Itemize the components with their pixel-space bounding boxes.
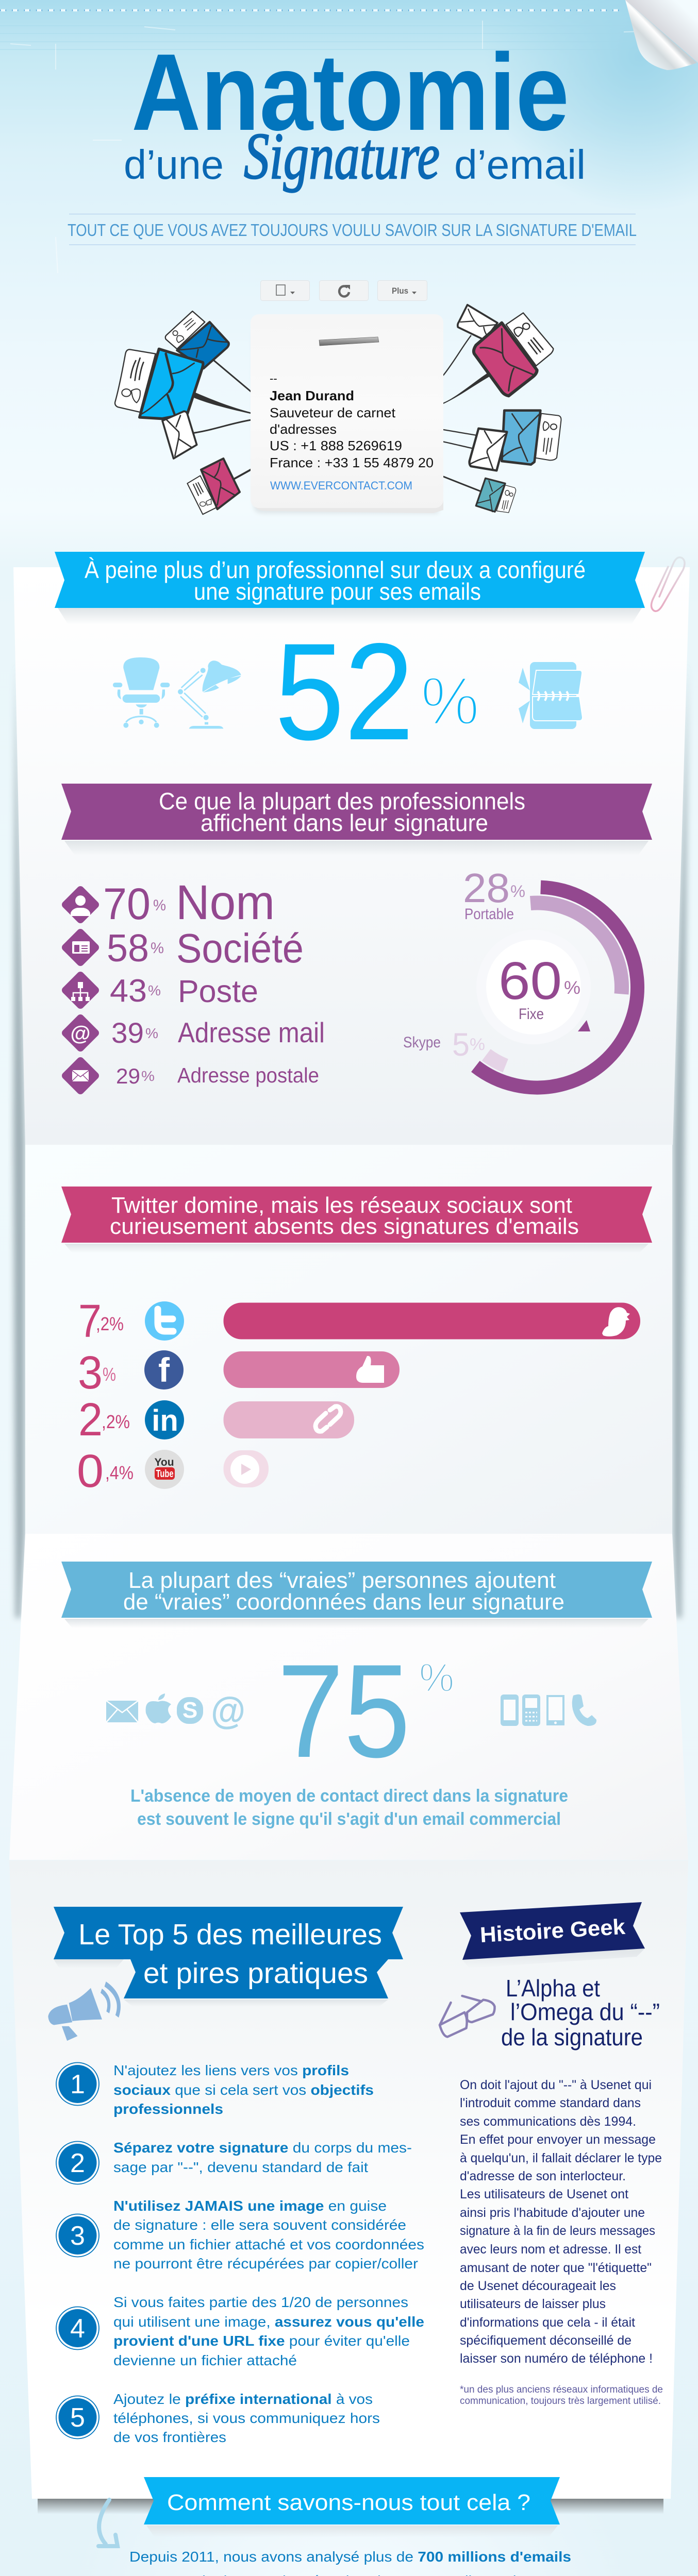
- icon: handset: [572, 1694, 596, 1726]
- signature text: WWW.EVERCONTACT.COM: [270, 479, 412, 492]
- arc: skype 5%: [486, 1055, 506, 1065]
- footnote: [460, 2384, 663, 2406]
- icon: skype: [177, 1697, 203, 1724]
- icon: facebook: [144, 1350, 184, 1389]
- footnote: communication, toujours très largement utilisé.: [460, 2396, 661, 2406]
- signature text: --: [270, 372, 277, 385]
- tip 2: sage par "--", devenu standard de fait: [113, 2159, 368, 2175]
- stat: 52%: 52: [275, 614, 414, 769]
- title: d'une Signature d'email: d’email: [454, 142, 586, 188]
- row: twitter 7,2%: ,2%: [96, 1313, 124, 1334]
- heading: l'alpha et l'omega: de la signature: [501, 2024, 643, 2050]
- tip 2: 2: [70, 2148, 85, 2178]
- tip 2: [56, 2140, 412, 2184]
- signature text: Jean Durand: [270, 388, 354, 403]
- row: facebook 3%: 3: [78, 1347, 103, 1399]
- illustration: envelopes right: [443, 305, 561, 513]
- label: 5% skype: Skype: [403, 1034, 441, 1051]
- icon: envelope: [106, 1701, 138, 1722]
- text: histoire geek body: En effet pour envoyer un message: [460, 2132, 656, 2147]
- tip 4: [56, 2294, 424, 2368]
- tip 1: 1: [70, 2070, 85, 2099]
- tip 1: sociaux que si cela sert vos objectifs: [113, 2082, 374, 2098]
- list: contents of signature: [60, 875, 325, 1096]
- row: linkedin 2,2%: 2: [78, 1394, 103, 1446]
- icon: mobile keypad: [522, 1694, 540, 1726]
- banner: histoire geek: [460, 1902, 645, 1968]
- banner: top 5: Le Top 5 des meilleures: [78, 1918, 382, 1951]
- tip 4: devienne un fichier attaché: [113, 2352, 297, 2368]
- mail toolbar buttons: [261, 280, 427, 301]
- text: histoire geek body: d'adresse de son interlocteur.: [460, 2169, 626, 2183]
- icon: play: [230, 1455, 259, 1484]
- signature text: France : +33 1 55 4879 20: [270, 455, 434, 470]
- tip 1: N'ajoutez les liens vers vos profils: [113, 2062, 349, 2078]
- banner: vraies personnes: [61, 1562, 652, 1628]
- signature card: [251, 314, 443, 514]
- label: 28% portable: Portable: [464, 906, 514, 923]
- bar: linkedin: [224, 1401, 354, 1438]
- banner: twitter domine: curieusement absents des signatures d'emails: [110, 1214, 579, 1239]
- tip 2: Séparez votre signature du corps du mes-: [113, 2140, 412, 2156]
- banner: histoire geek: Histoire Geek: [479, 1914, 626, 1947]
- banner: vraies personnes: La plupart des “vraies” personnes ajoutent: [128, 1568, 556, 1593]
- item: Nom 70%: 70: [103, 879, 151, 929]
- icon: twitter: [145, 1301, 184, 1341]
- icon: youtube: You: [154, 1456, 174, 1468]
- text: methodology: [84, 2549, 617, 2576]
- item: Société 58%: [60, 925, 304, 971]
- heading: l'alpha et l'omega: L’Alpha et: [506, 1975, 600, 2002]
- text: histoire geek body: ses communications dès 1994.: [460, 2114, 636, 2129]
- item: Poste 43%: [60, 970, 258, 1010]
- paper section 2: [25, 1145, 672, 1534]
- item: Poste 43%: Poste: [178, 974, 258, 1009]
- stat: 75%: 75: [277, 1636, 410, 1785]
- icon: glasses: [440, 1996, 495, 2037]
- row: youtube 0,4%: [77, 1446, 269, 1497]
- stitched top edge: [0, 10, 655, 273]
- banner: twitter domine: Twitter domine, mais les réseaux sociaux sont: [111, 1193, 572, 1218]
- caption: commercial email: L'absence de moyen de contact direct dans la signature: [130, 1786, 568, 1806]
- row: facebook 3%: [78, 1347, 400, 1399]
- icon: tablet phone: [546, 1695, 564, 1725]
- page curl: [625, 0, 698, 70]
- row: youtube 0,4%: 0: [77, 1446, 104, 1497]
- item: Nom 70%: Nom: [176, 875, 275, 930]
- item: Société 58%: %: [151, 940, 164, 957]
- title: Anatomie: Anatomie: [131, 31, 569, 153]
- tip 3: 3: [70, 2221, 85, 2251]
- banner: comment savons-nous: Comment savons-nous tout cela ?: [167, 2490, 530, 2515]
- item: Société 58%: Société: [176, 925, 304, 971]
- item: Nom 70%: %: [153, 897, 166, 914]
- text: histoire geek body: ainsi pris l'habitude d'ajouter une: [460, 2206, 645, 2220]
- icon: thumb up: [356, 1356, 384, 1383]
- caption: commercial email: est souvent le signe qu'il s'agit d'un email commercial: [137, 1809, 561, 1829]
- tip 5: de vos frontières: [113, 2429, 226, 2445]
- label: 5% skype: %: [470, 1035, 485, 1054]
- label: 60% fixe: [498, 951, 580, 1023]
- row: linkedin 2,2%: [78, 1394, 354, 1446]
- item: Poste 43%: 43: [110, 973, 147, 1009]
- banner: à peine plus d'un professionnel: [55, 552, 645, 624]
- item: Adresse mail 39%: [60, 1013, 325, 1053]
- tip 3: comme un fichier attaché et vos coordonnées: [113, 2236, 424, 2252]
- row: twitter 7,2%: [78, 1296, 640, 1347]
- tip 1: [56, 2062, 374, 2117]
- row: linkedin 2,2%: ,2%: [102, 1411, 130, 1432]
- title: d'une Signature d'email: d’une: [124, 142, 224, 188]
- tip 5: téléphones, si vous communiquez hors: [113, 2410, 380, 2426]
- icon: youtube: [145, 1450, 184, 1489]
- tip 4: Si vous faites partie des 1/20 de personnes: [113, 2294, 408, 2310]
- item: Adresse postale 29%: Adresse postale: [177, 1063, 319, 1087]
- text: methodology: Depuis 2011, nous avons analysé plus de 700 millions d'emails: [129, 2549, 571, 2565]
- bar: youtube: [224, 1450, 269, 1487]
- icon: bird: [602, 1307, 630, 1336]
- item: Société 58%: 58: [107, 926, 149, 970]
- tip 3: N'utilisez JAMAIS une image en guise: [113, 2198, 387, 2214]
- text: histoire geek body: spécifiquement déconseillé de: [460, 2333, 631, 2348]
- tip 3: [56, 2198, 424, 2272]
- icon: paperclip: [651, 557, 685, 611]
- icon: at sign: @: [210, 1690, 245, 1732]
- banner: top 5: [54, 1907, 403, 2007]
- signature text: Sauveteur de carnet: [270, 405, 396, 420]
- heading: l'alpha et l'omega: [501, 1975, 660, 2050]
- footnote: *un des plus anciens réseaux informatiques de: [460, 2384, 663, 2395]
- label: 60% fixe: %: [564, 978, 580, 998]
- stat: 75%: %: [419, 1655, 454, 1700]
- icon: linkedin: in: [152, 1404, 178, 1437]
- row: twitter 7,2%: 7: [78, 1296, 102, 1347]
- banner: ce que la plupart des professionnels: Ce que la plupart des professionnels: [159, 788, 525, 815]
- caption: commercial email: [130, 1786, 568, 1829]
- text: histoire geek body: d'informations que cela - il était: [460, 2315, 635, 2330]
- tip 1: professionnels: [113, 2101, 223, 2117]
- title: d'une Signature d'email: [124, 120, 586, 193]
- item: Adresse postale 29%: %: [141, 1068, 155, 1084]
- text: histoire geek body: de Usenet décourageait les: [460, 2279, 616, 2293]
- label: 28% portable: [463, 865, 525, 923]
- icon: smartphone: [501, 1694, 519, 1726]
- item: Adresse mail 39%: @: [70, 1022, 91, 1045]
- banner: comment savons-nous: [144, 2477, 560, 2537]
- icon: youtube: Tube: [156, 1468, 173, 1480]
- icon: facebook: f: [158, 1351, 170, 1389]
- icon: linkedin: [145, 1400, 184, 1439]
- text: histoire geek body: utilisateurs de laisser plus: [460, 2297, 606, 2311]
- icon: office chair: [113, 657, 170, 728]
- item: Adresse mail 39%: 39: [111, 1016, 144, 1049]
- row: youtube 0,4%: ,4%: [105, 1462, 134, 1483]
- icon: chain link: [315, 1406, 341, 1431]
- banner: twitter domine: [61, 1187, 652, 1253]
- arc: fixe 60%: [475, 887, 637, 1088]
- bar: twitter: [224, 1302, 640, 1340]
- tip 5: 5: [70, 2403, 85, 2433]
- text: histoire geek body: On doit l'ajout du "--" à Usenet qui: [460, 2078, 652, 2092]
- icons: phones: [501, 1694, 596, 1726]
- text: histoire geek body: l'introduit comme standard dans: [460, 2096, 641, 2110]
- text: histoire geek body: à quelqu'un, il fallait déclarer le type: [460, 2151, 662, 2165]
- donut centre disc: [476, 930, 591, 1044]
- item: Adresse postale 29%: [60, 1056, 319, 1096]
- banner: vraies personnes: de “vraies” coordonnées dans leur signature: [123, 1589, 564, 1615]
- banner: à peine plus d'un professionnel: À peine plus d’un professionnel sur deux a configuré: [85, 556, 586, 583]
- signature text: US : +1 888 5269619: [270, 438, 402, 453]
- item: Poste 43%: %: [148, 982, 161, 998]
- paper section 3: [9, 1534, 688, 1860]
- paper bottom shadow: [38, 2499, 663, 2514]
- banner: ce que la plupart des professionnels: [61, 784, 652, 855]
- tip 5: [56, 2391, 380, 2445]
- text: histoire geek body: Les utilisateurs de Usenet ont: [460, 2187, 628, 2201]
- row: facebook 3%: %: [103, 1364, 116, 1385]
- banner: à peine plus d'un professionnel: une signature pour ses emails: [194, 578, 481, 605]
- icon: apple: [146, 1693, 171, 1723]
- tip 3: de signature : elle sera souvent considérée: [113, 2217, 406, 2233]
- banner: top 5: et pires pratiques: [143, 1957, 368, 1990]
- paper section 4: [9, 1860, 688, 2499]
- label: 5% skype: 5: [452, 1027, 470, 1063]
- text: histoire geek body: [460, 2078, 662, 2366]
- tip 4: 4: [70, 2314, 85, 2344]
- tip 3: ne pourront être récupérées par copier/coller: [113, 2256, 418, 2272]
- text: histoire geek body: laisser son numéro de téléphone !: [460, 2351, 653, 2366]
- signature text: [270, 372, 434, 492]
- label: 60% fixe: 60: [498, 951, 562, 1010]
- title: d'une Signature d'email: Signature: [244, 120, 440, 193]
- icon: skype: S: [182, 1698, 197, 1723]
- icon: notebook: [519, 662, 583, 729]
- item: Adresse postale 29%: 29: [116, 1064, 140, 1088]
- text: histoire geek body: amusant de noter que "l'étiquette": [460, 2261, 652, 2275]
- icon: megaphone: [48, 1984, 119, 2041]
- arrow: [98, 2500, 118, 2546]
- text: histoire geek body: avec leurs nom et adresse. Il est: [460, 2242, 641, 2257]
- illustration: envelopes left: [115, 311, 252, 514]
- mail toolbar buttons: Plus: [392, 286, 408, 296]
- arc: portable 28%: [530, 903, 622, 994]
- heading: l'alpha et l'omega: l’Omega du “--”: [510, 1998, 660, 2025]
- item: Adresse mail 39%: %: [145, 1025, 158, 1041]
- tip 4: qui utilisent une image, assurez vous qu'elle: [113, 2314, 424, 2330]
- paper section 1: [13, 567, 690, 1145]
- signature text: d'adresses: [270, 421, 337, 437]
- card clip: [319, 337, 379, 346]
- tip 4: provient d'une URL fixe pour éviter qu'elle: [113, 2333, 410, 2349]
- donut chart: phone types: [403, 865, 637, 1088]
- banner: ce que la plupart des professionnels: affichent dans leur signature: [201, 809, 488, 836]
- icon: desk lamp: [178, 660, 241, 728]
- paper edge shadows: [13, 659, 688, 1618]
- label: 28% portable: %: [510, 882, 525, 901]
- item: Nom 70%: [60, 875, 275, 930]
- item: Adresse mail 39%: Adresse mail: [178, 1016, 325, 1048]
- text: histoire geek body: signature à la fin de leurs messages: [460, 2224, 655, 2238]
- stat: 52%: %: [421, 663, 479, 739]
- bar: facebook: [224, 1351, 400, 1388]
- label: 60% fixe: Fixe: [519, 1006, 544, 1023]
- icons: contact channels: [106, 1690, 245, 1732]
- tip 5: Ajoutez le préfixe international à vos: [113, 2391, 373, 2407]
- label: 28% portable: 28: [463, 865, 510, 911]
- label: 5% skype: [403, 1027, 485, 1063]
